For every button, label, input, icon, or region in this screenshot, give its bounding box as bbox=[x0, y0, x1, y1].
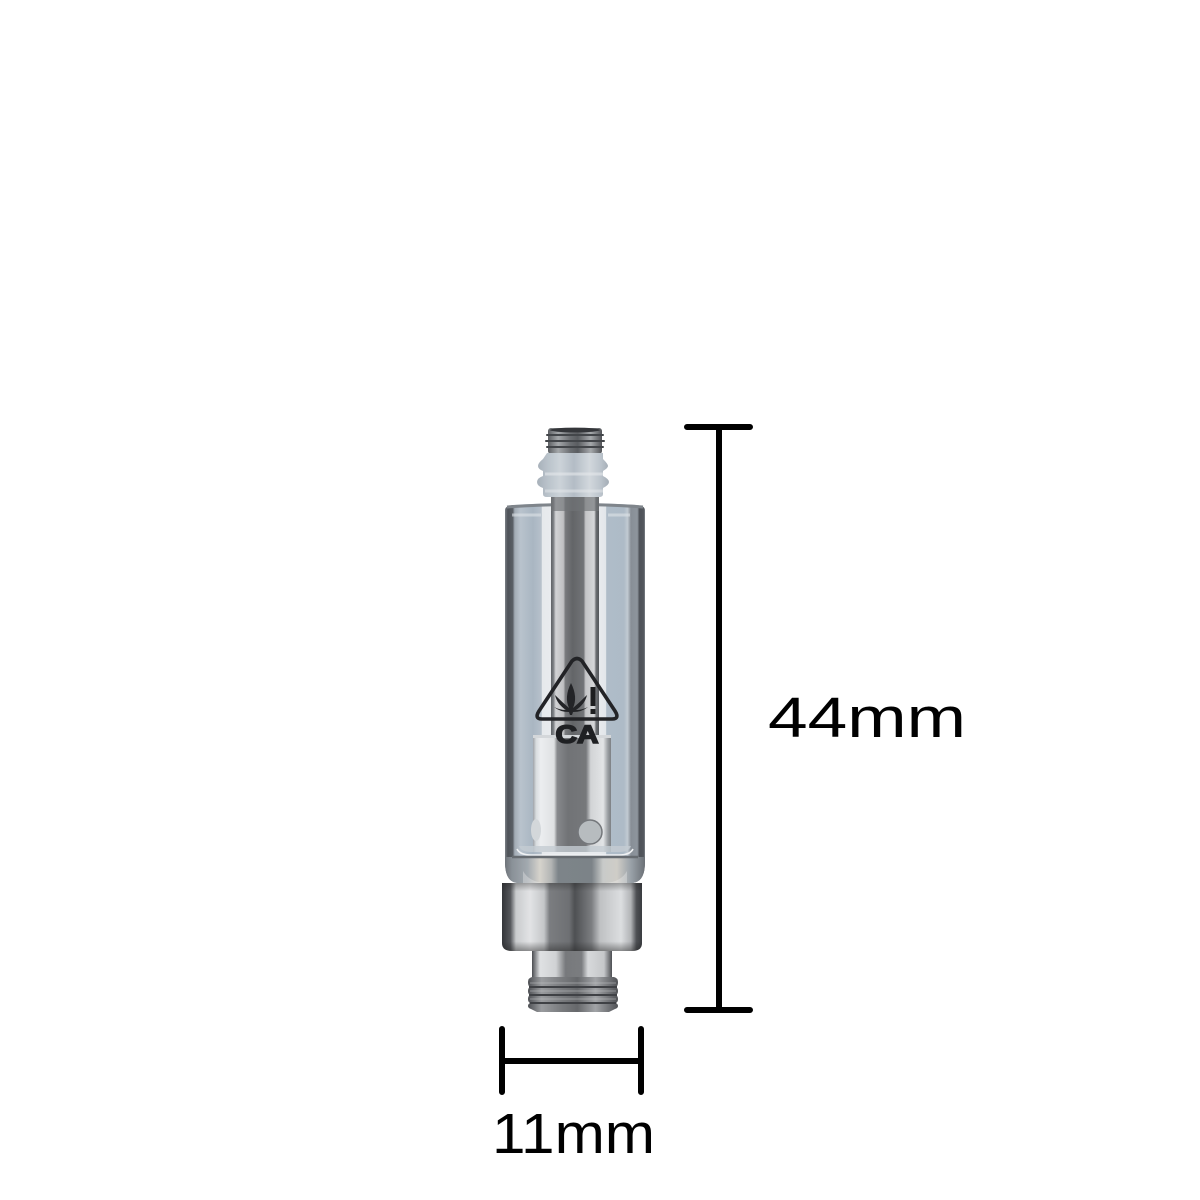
width dimension bracket bbox=[502, 1029, 641, 1092]
glass tank bbox=[505, 503, 645, 883]
silicone seal bbox=[537, 453, 609, 497]
oil intake holes bbox=[531, 819, 602, 844]
top threaded connector bbox=[546, 428, 604, 454]
centre post bbox=[551, 497, 599, 739]
metal collar bbox=[502, 883, 642, 951]
lower metal sleeve bbox=[505, 735, 645, 883]
height label: 44mm bbox=[768, 686, 966, 750]
bottom thread bbox=[528, 977, 618, 1012]
CA label: CA bbox=[556, 721, 598, 749]
cartridge product illustration bbox=[502, 428, 645, 1012]
lower stem bbox=[532, 951, 612, 979]
height dimension bracket bbox=[687, 427, 750, 1010]
warning symbol: California cannabis mark bbox=[537, 658, 617, 749]
width label: 11mm bbox=[492, 1102, 655, 1166]
